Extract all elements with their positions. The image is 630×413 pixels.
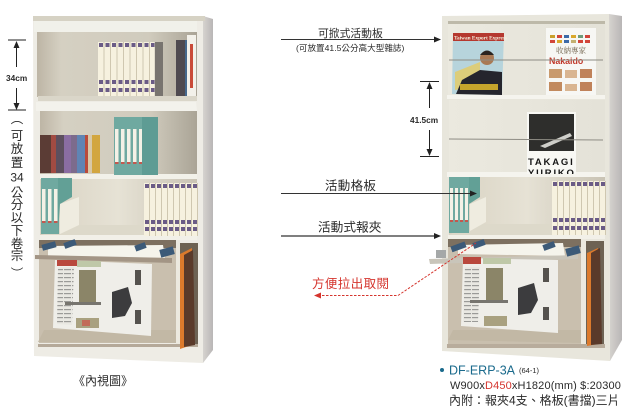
- callout: movable shelf: [281, 178, 477, 196]
- hanging file rack left: [35, 239, 175, 263]
- callout: easy pull out: 方便拉出取閱: [312, 276, 389, 291]
- included items: 內附：報夾4支、格板(書擋)三片: [449, 392, 620, 408]
- callout: movable file clip: [281, 220, 441, 239]
- orange binder left: [180, 248, 195, 349]
- vertical note: holds files under 34cm: 公: [11, 186, 24, 200]
- newspaper right: [461, 257, 558, 333]
- callout: movable file clip: 活動式報夾: [318, 220, 382, 234]
- callout: flip-up panel: [281, 26, 441, 53]
- magazine: Takagi Yuriko: YURIKO: [528, 168, 576, 179]
- dimensions and price: W900xD450xH1820(mm) $:20300: [450, 380, 621, 392]
- vertical note: holds files under 34cm: 下: [11, 224, 23, 238]
- magazine: Takagi Yuriko: [520, 112, 580, 179]
- callout: flip-up panel: (可放置41.5公分高大型雜誌): [296, 42, 405, 53]
- vertical note: holds files under 34cm: 以: [11, 211, 24, 225]
- vertical note: holds files under 34cm: 可: [11, 129, 23, 143]
- vertical note: holds files under 34cm: 分: [11, 198, 24, 212]
- product info: [440, 364, 621, 408]
- magazine: Nakaido: [546, 28, 596, 95]
- orange binder right: [587, 248, 602, 346]
- cabinet: right with magazines: [429, 14, 622, 361]
- cabinet body right: [442, 14, 622, 361]
- vertical note: holds files under 34cm: 卷: [11, 236, 24, 251]
- cabinet body left: [33, 16, 213, 363]
- dimension: 34cm: 34cm: [6, 73, 27, 83]
- hanging file rack right: [429, 239, 581, 264]
- magazine: Taiwan Export Express: Taiwan Export Express: [454, 36, 507, 42]
- caption: interior view: 《內視圖》: [73, 373, 133, 388]
- vertical note: holds files under 34cm: 置: [11, 156, 23, 170]
- cabinet: left interior view: [33, 16, 213, 363]
- books top shelf: [98, 35, 196, 96]
- vertical note: holds files under 34cm: 34: [10, 170, 24, 184]
- model number: DF-ERP-3A: [449, 364, 516, 378]
- vertical note: holds files under 34cm: ︵: [11, 112, 24, 126]
- dimension: 41.5cm: [410, 82, 439, 156]
- magazine: Nakaido: Nakaido: [549, 56, 584, 66]
- magazine: Nakaido: 收納專家: [556, 45, 586, 56]
- dimension: 41.5cm: 41.5cm: [410, 115, 438, 125]
- callout: movable shelf: 活動格板: [325, 178, 376, 193]
- vertical note: holds files under 34cm: 放: [11, 141, 24, 156]
- books middle shelf: [40, 117, 158, 175]
- model number: [440, 364, 540, 378]
- books lower shelf: [41, 178, 198, 236]
- vertical note: holds files under 34cm: [10, 112, 24, 281]
- retaining bars: [449, 60, 603, 140]
- callout: flip-up panel: 可掀式活動板: [318, 26, 383, 40]
- magazine: Taiwan Export Express: [452, 33, 507, 95]
- magazine: Takagi Yuriko: TAKAGI: [528, 157, 575, 168]
- dimension: 34cm: [6, 40, 27, 110]
- vertical note: holds files under 34cm: 宗: [11, 248, 23, 263]
- model number: (64-1): [519, 366, 540, 375]
- books right lower shelf: [449, 177, 606, 235]
- vertical note: holds files under 34cm: ︶: [11, 267, 24, 281]
- newspaper left: [53, 260, 152, 336]
- callout: easy pull out: [312, 243, 476, 298]
